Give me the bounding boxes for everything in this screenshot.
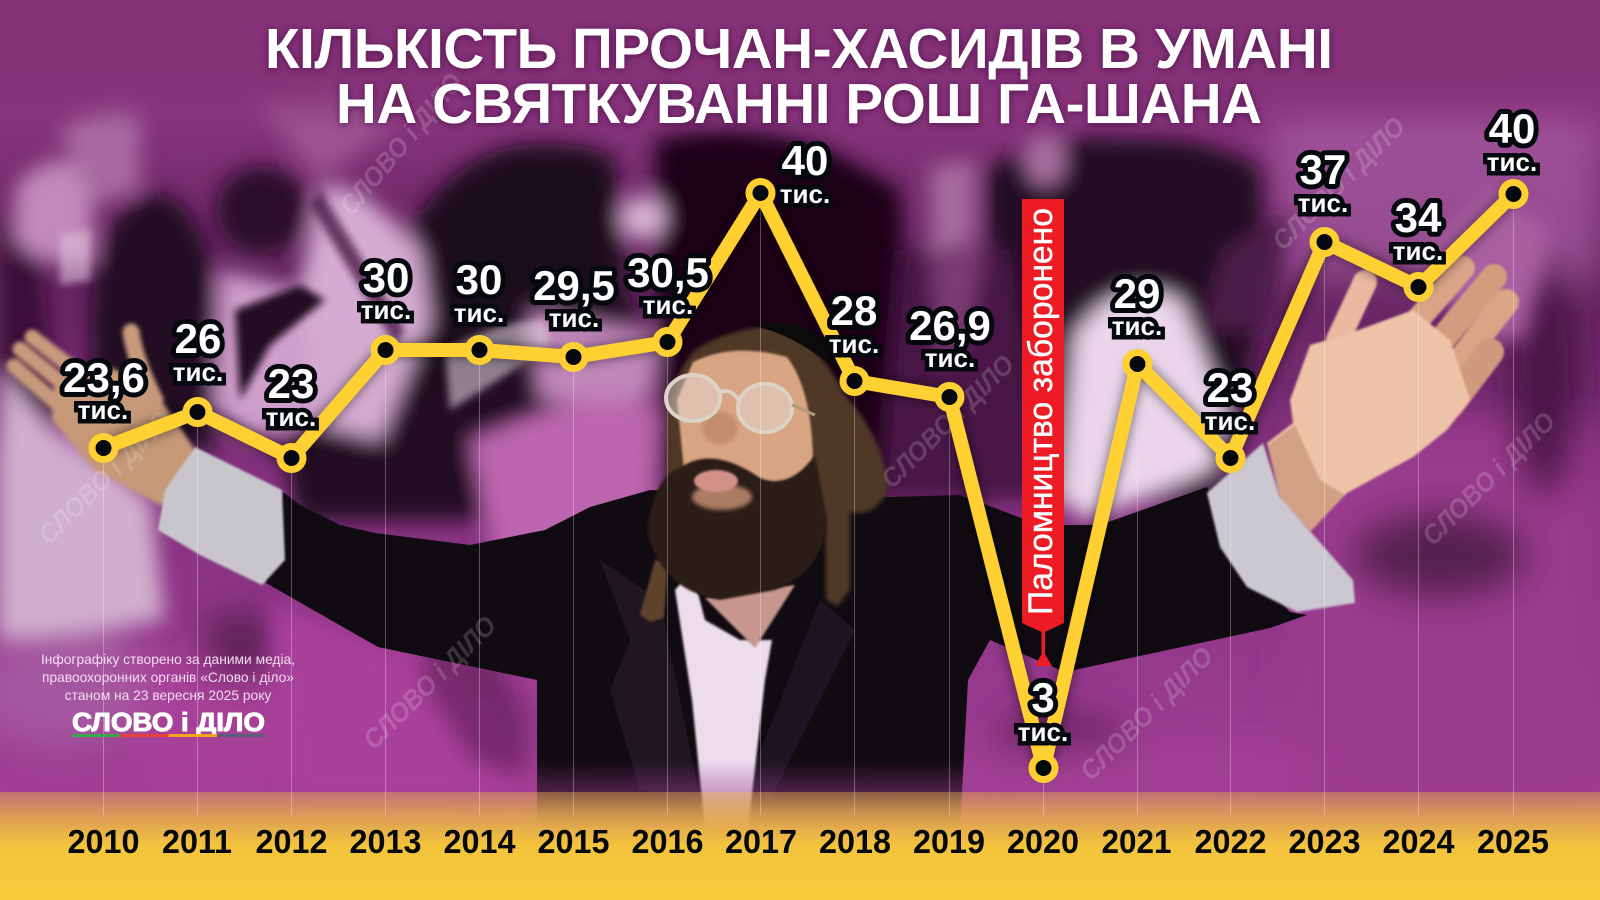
year axis labels: 2022: [1194, 824, 1266, 861]
watermarks: СЛОВО і ДІЛО: [1416, 406, 1561, 551]
dark crowd figures: [92, 193, 214, 450]
value 2013: 30: [363, 254, 409, 301]
year axis labels: 2020: [1007, 824, 1079, 861]
year axis labels: 2011: [162, 824, 232, 861]
value 2017: [780, 137, 830, 209]
year axis labels: 2010: [68, 824, 140, 861]
watermarks: [32, 68, 1561, 786]
drop lines from points to the year axis: [104, 193, 1514, 815]
chin skin: [692, 484, 752, 510]
value 2025: тис.: [1487, 147, 1537, 177]
value 2018: 28: [831, 287, 877, 334]
value 2014: тис.: [454, 298, 504, 328]
mouth: [694, 470, 738, 492]
value 2017: тис.: [780, 179, 830, 209]
yellow year band: [0, 792, 1600, 900]
value 2012: 23: [268, 360, 314, 407]
value 2023: [1298, 146, 1348, 218]
value 2012: [266, 360, 316, 432]
year axis labels: 2023: [1288, 824, 1360, 861]
watermarks: СЛОВО і ДІЛО: [32, 405, 177, 550]
year axis labels: 2014: [444, 824, 516, 861]
value 2010: 23,6: [63, 354, 145, 401]
photo: man with outstretched arms: [14, 268, 1506, 830]
value 2022: [1205, 364, 1255, 436]
trend line: [104, 193, 1514, 768]
line chart: [92, 182, 1525, 780]
neck: [705, 585, 795, 648]
source note: [41, 652, 295, 703]
value 2013: тис.: [361, 295, 411, 325]
source note: Інфографіку створено за даними медіа,: [41, 652, 295, 667]
value 2010: тис.: [78, 395, 128, 425]
value 2018: тис.: [829, 329, 879, 359]
value 2021: тис.: [1112, 311, 1162, 341]
value 2022: тис.: [1205, 406, 1255, 436]
value 2020: тис.: [1018, 717, 1068, 747]
left hand: [14, 332, 195, 505]
year axis labels: 2019: [913, 824, 985, 861]
value 2015: 29,5: [533, 262, 615, 309]
beard: [647, 455, 827, 600]
value 2011: [173, 315, 223, 387]
value 2023: 37: [1300, 146, 1346, 193]
value 2020: 3: [1031, 674, 1055, 721]
value 2011: тис.: [173, 357, 223, 387]
watermarks: СЛОВО і ДІЛО: [357, 610, 502, 755]
value labels: [63, 105, 1537, 747]
shirt: [675, 570, 772, 830]
value 2025: [1487, 105, 1537, 177]
value 2016: 30,5: [627, 249, 709, 296]
title: НА СВЯТКУВАННІ РОШ ГА-ШАНА: [336, 72, 1262, 135]
data points: [92, 182, 1525, 780]
title: КІЛЬКІСТЬ ПРОЧАН-ХАСИДІВ В УМАНІ: [265, 17, 1333, 80]
year axis labels: 2016: [632, 824, 704, 861]
watermarks: СЛОВО і ДІЛО: [1074, 641, 1219, 786]
face: [677, 351, 813, 490]
value 2017: 40: [782, 137, 828, 184]
red callout: pilgrimage banned: Паломництво заборонено: [1022, 208, 1060, 615]
value 2023: тис.: [1298, 188, 1348, 218]
value 2014: 30: [456, 256, 502, 303]
value 2020: [1018, 674, 1068, 747]
year axis labels: 2012: [256, 824, 328, 861]
watermarks: СЛОВО і ДІЛО: [875, 349, 1020, 494]
value 2021: 29: [1114, 270, 1160, 317]
year axis labels: 2021: [1102, 824, 1172, 861]
year axis labels: 2025: [1477, 824, 1549, 861]
value 2015: тис.: [549, 303, 599, 333]
value 2012: тис.: [266, 402, 316, 432]
year axis labels: 2013: [350, 824, 422, 861]
year axis labels: 2018: [819, 824, 891, 861]
value 2019: 26,9: [909, 302, 991, 349]
value 2025: 40: [1489, 105, 1535, 152]
light shirts: [15, 161, 95, 264]
title: [265, 17, 1333, 135]
year axis labels: 2015: [538, 824, 610, 861]
watermarks: СЛОВО і ДІЛО: [333, 68, 469, 221]
value 2018: [829, 287, 879, 359]
value 2016: [627, 249, 709, 320]
watermarks: СЛОВО і ДІЛО: [1266, 111, 1411, 256]
value 2010: [63, 354, 145, 425]
value 2019: [909, 302, 991, 373]
year axis labels: [68, 824, 1549, 861]
right hand: [1267, 268, 1506, 532]
value 2019: тис.: [925, 343, 975, 373]
value 2016: тис.: [643, 290, 693, 320]
source note: правоохоронних органів «Слово і діло»: [42, 670, 294, 685]
value 2011: 26: [175, 315, 221, 362]
value 2024: тис.: [1393, 236, 1443, 266]
right cuff: [1207, 443, 1355, 612]
value 2014: [454, 256, 504, 328]
jacket: [266, 487, 1307, 830]
value 2015: [533, 262, 615, 333]
year axis labels: 2024: [1382, 824, 1455, 861]
value 2022: 23: [1207, 364, 1253, 411]
value 2024: [1393, 194, 1443, 266]
year axis labels: 2017: [725, 824, 797, 861]
source note: станом на 23 вересня 2025 року: [65, 688, 271, 703]
value 2013: [361, 254, 411, 325]
glasses: [666, 375, 815, 432]
left cuff: [158, 447, 285, 585]
nose: [702, 412, 738, 444]
kippah: [750, 323, 845, 378]
value 2024: 34: [1395, 194, 1442, 241]
value 2021: [1112, 270, 1162, 341]
hair and earlocks: [668, 326, 888, 606]
logo: Слово і діло: СЛОВО і ДІЛО: [72, 707, 265, 737]
